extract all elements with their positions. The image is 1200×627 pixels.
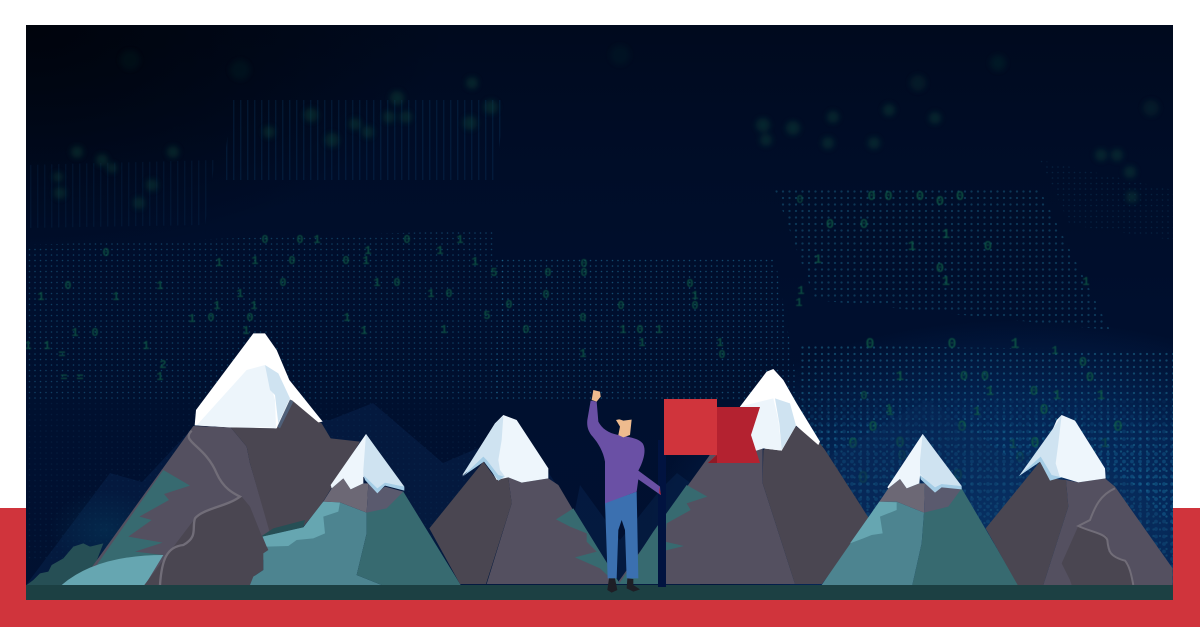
snow cap <box>462 415 548 483</box>
binary digits right: 0 <box>1030 435 1040 452</box>
forest <box>619 485 707 584</box>
binary digits right: 1 <box>655 323 663 337</box>
binary digits left: 0 <box>342 254 350 268</box>
binary digits left: 0 <box>403 233 411 247</box>
binary digits right: 0 <box>617 299 625 313</box>
binary digits right: 1 <box>908 239 916 255</box>
binary digits left: 1 <box>24 339 32 353</box>
binary digits right: 1 <box>886 404 894 419</box>
mountain 2 teal <box>250 434 461 585</box>
binary digits right: 0 <box>1039 402 1049 419</box>
shirt <box>587 401 661 503</box>
binary digits left: 2 <box>159 358 167 372</box>
binary digits left: 1 <box>440 323 448 337</box>
snow cap <box>195 333 323 428</box>
blurred green binary bokeh <box>53 45 1159 209</box>
bottom left glow <box>82 513 124 548</box>
binary digits right: 0 <box>1079 355 1087 371</box>
binary digits right: 0 <box>947 336 957 353</box>
binary digits left <box>24 233 588 385</box>
binary digits left: 5 <box>490 266 498 280</box>
binary digits right: 0 <box>1030 384 1038 400</box>
binary digits right: 1 <box>973 404 981 419</box>
binary digits right: 0 <box>984 239 992 255</box>
binary digits left: 1 <box>364 244 372 258</box>
binary digits left: 0 <box>261 233 269 247</box>
binary digits right: 0 <box>826 217 834 233</box>
snow cap <box>331 434 404 493</box>
binary digits right: 0 <box>936 194 944 210</box>
binary digits left: 0 <box>207 311 215 325</box>
binary digits left: 1 <box>242 324 250 338</box>
binary digits right: 1 <box>1051 344 1059 358</box>
binary digits right: 1 <box>1010 336 1020 353</box>
snow cap <box>740 369 820 452</box>
binary digits right: 1 <box>1082 275 1090 289</box>
binary digits left: 1 <box>188 312 196 326</box>
binary digits left: 1 <box>456 233 464 247</box>
binary digits left: 0 <box>296 233 304 247</box>
binary digits right: 0 <box>897 448 907 465</box>
mountain 1 <box>27 333 360 585</box>
binary digits left: 0 <box>91 326 99 340</box>
front rock <box>144 497 268 585</box>
binary digits left: 1 <box>427 287 435 301</box>
binary digits right: 0 <box>953 467 963 486</box>
red flag <box>664 399 760 463</box>
rock band <box>879 479 962 513</box>
background mountains <box>26 400 1173 585</box>
binary digits left: 1 <box>250 299 258 313</box>
snow cap <box>1019 415 1106 482</box>
right glow <box>700 339 1173 585</box>
head and neck <box>616 418 632 437</box>
binary digits right: 0 <box>860 389 868 403</box>
binary digits left: 0 <box>580 257 588 271</box>
forest <box>97 470 190 565</box>
binary digits right: 1 <box>1009 437 1017 453</box>
binary digits left: 0 <box>288 254 296 268</box>
mountain 6 <box>986 415 1173 585</box>
binary digits left: 0 <box>393 276 401 290</box>
binary digits right: 0 <box>895 434 905 452</box>
raised fist <box>592 390 601 402</box>
binary digits left: 0 <box>522 323 530 337</box>
forest <box>556 508 620 584</box>
binary digits right: 0 <box>686 277 694 291</box>
binary digits right: 0 <box>858 469 868 489</box>
binary digits right: 1 <box>716 336 724 350</box>
binary digits right: 1 <box>1101 436 1109 452</box>
binary digits right: 0 <box>936 261 944 277</box>
binary digits left: 1 <box>215 256 223 270</box>
binary digits right: 1 <box>1097 388 1105 404</box>
binary digits left: 1 <box>156 279 164 293</box>
hair <box>614 412 633 421</box>
binary digits right: 1 <box>896 369 904 385</box>
binary digits left: 0 <box>579 311 587 325</box>
binary digits right: 1 <box>691 289 699 303</box>
binary digits right: 0 <box>957 418 967 436</box>
binary digits left: = <box>58 348 66 362</box>
slopes <box>822 488 1018 585</box>
dotted data grid <box>26 100 1173 600</box>
mountain 3 <box>429 415 620 584</box>
lake <box>62 555 163 585</box>
binary digits left: 5 <box>483 309 491 323</box>
binary digits left: 0 <box>544 266 552 280</box>
binary digits left: 0 <box>64 279 72 293</box>
binary digits right: 1 <box>986 384 994 400</box>
rock faces <box>429 462 617 584</box>
binary digits right: 0 0 <box>867 189 893 205</box>
binary digits right: 0 <box>868 419 878 436</box>
snow cap <box>887 434 962 493</box>
binary digits right: 0 <box>865 336 875 353</box>
boots <box>607 578 640 593</box>
binary digits left: 1 <box>373 276 381 290</box>
person raising fist <box>587 390 661 593</box>
binary digits left: 1 <box>360 324 368 338</box>
binary digits left: 1 <box>313 233 321 247</box>
binary digits left: 0 <box>102 246 110 260</box>
binary digits right: 1 <box>795 296 803 310</box>
binary digits left: 1 <box>156 370 164 384</box>
binary digits right: 1 <box>638 336 646 350</box>
binary digits right: 0 <box>981 369 989 385</box>
trousers <box>605 492 638 578</box>
binary digits left: 1 <box>579 347 587 361</box>
binary digits right: 0 <box>1086 370 1094 386</box>
binary digits right: 0 <box>960 369 968 385</box>
foothill bushes <box>27 543 103 585</box>
ground strip <box>26 585 1173 600</box>
binary digits left: = <box>76 371 84 385</box>
mountain 5 teal <box>822 434 1018 585</box>
binary digits left: 1 <box>142 339 150 353</box>
binary digits left: 1 <box>362 254 370 268</box>
binary digits right: 0 <box>1113 418 1123 436</box>
flag pole <box>658 440 666 587</box>
binary digits right: 0 <box>848 435 858 453</box>
slopes <box>250 492 461 585</box>
binary digits left: 1 <box>471 255 479 269</box>
red cuff <box>659 487 661 495</box>
rock faces <box>80 399 360 585</box>
rock faces <box>986 462 1173 585</box>
binary digits right: 0 <box>691 299 699 313</box>
rock band <box>323 478 403 513</box>
binary digits right: 0 <box>1015 449 1025 467</box>
binary digits right: 1 <box>814 252 822 267</box>
binary digits right: 1 <box>797 284 805 298</box>
binary digits left: = <box>60 371 68 385</box>
binary digits left: 1 <box>343 311 351 325</box>
binary digits left: 1 <box>112 290 120 304</box>
binary digits left: 0 <box>505 298 513 312</box>
binary digits left: 0 <box>279 276 287 290</box>
binary digits left: 0 <box>542 288 550 302</box>
binary digits right: 0 <box>916 189 924 205</box>
binary digits right: 1 <box>619 323 627 337</box>
binary digits left: 0 <box>445 287 453 301</box>
mountain 4 with flag <box>617 369 870 584</box>
binary digits left: 1 <box>43 339 51 353</box>
binary digits right: 0 <box>636 323 644 337</box>
binary digits right: 1 <box>1053 388 1061 404</box>
binary digits left: 1 <box>251 254 259 268</box>
binary digits right: 0 <box>796 193 804 207</box>
binary digits right: 1 <box>942 274 950 290</box>
binary digits left: 0 <box>580 266 588 280</box>
trail <box>1078 488 1133 585</box>
binary digits left: 1 <box>213 299 221 313</box>
binary digits right: 1 <box>885 402 893 416</box>
trail <box>160 431 240 585</box>
binary digits right <box>617 189 1123 489</box>
binary digits left: 1 <box>71 326 79 340</box>
binary digits right: 0 <box>860 217 868 233</box>
binary digits left: 1 <box>236 287 244 301</box>
binary digits left: 1 <box>436 244 444 258</box>
binary digits left: 1 <box>37 290 45 304</box>
binary digits right: 0 <box>718 348 726 362</box>
red bottom band <box>0 508 1200 627</box>
binary digits left: 0 <box>246 311 254 325</box>
rock faces <box>617 407 870 584</box>
binary digits right: 1 <box>942 227 950 243</box>
binary digits right: 0 <box>956 189 964 205</box>
